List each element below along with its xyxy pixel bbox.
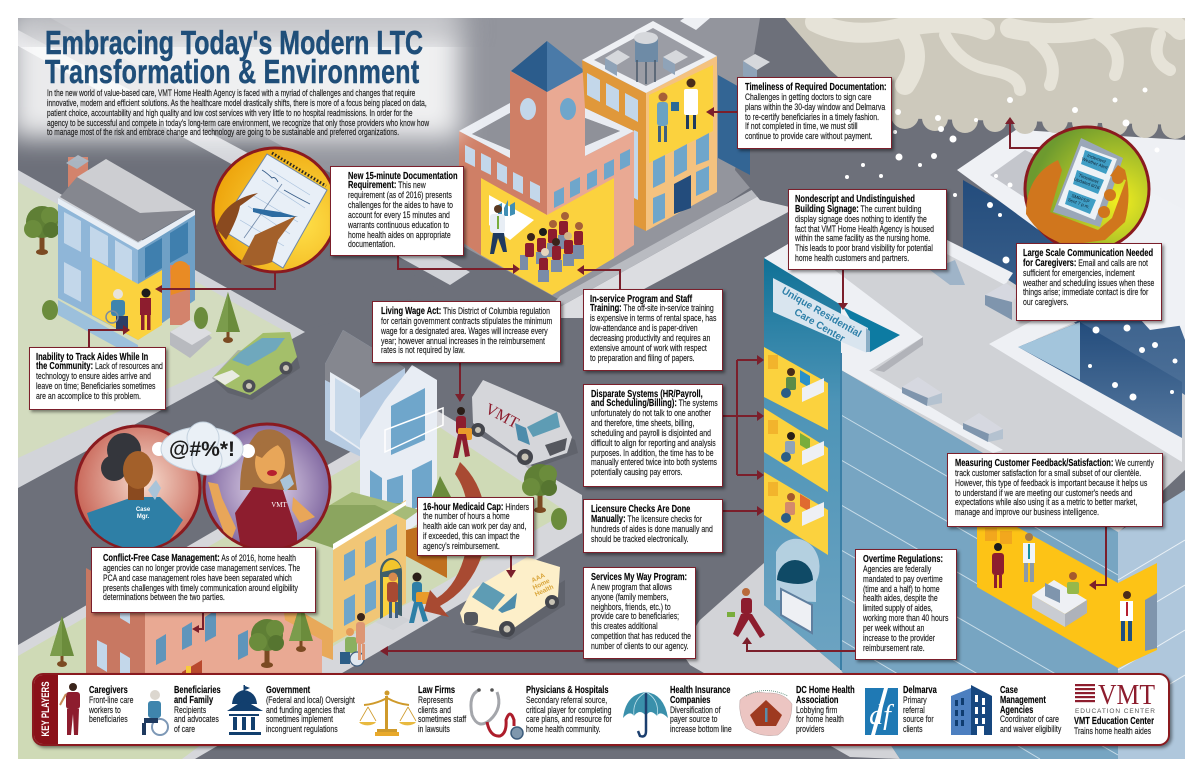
phone circle: Inclement [1086, 153, 1107, 164]
key player text: beneficiaries [174, 685, 221, 734]
speech cloud: @#%*! [169, 438, 235, 461]
front facade with sign [764, 258, 870, 670]
callout: disparate systems: manually entered twice into both systems [590, 457, 717, 467]
callout: customer feedback: expectations while also using it as a metric to better market, [955, 497, 1137, 507]
callout: overtime regulations: increase to the provider [862, 633, 935, 643]
callout: customer feedback: to understand if we are meeting our customer's needs and [955, 488, 1133, 498]
callout: disparate systems: difficult to align for reporting and analysis [590, 438, 715, 448]
key player text: physicians [526, 685, 612, 734]
callout: 16-hour medicaid cap: if exceeded, this can impact the [423, 531, 520, 541]
callout: overtime regulations: limited supply of aides, [862, 603, 932, 613]
key players tab [34, 675, 58, 744]
callout: building signage: display signage does nothing to identify the [795, 214, 927, 224]
upper gray ground [52, 18, 760, 298]
key player text: case management: Agencies [1000, 705, 1033, 716]
callout: customer feedback: However, this type of feedback is important because it helps us [955, 478, 1147, 488]
icon: DC home health association seal [740, 690, 792, 736]
callout: large scale communication: things arise; immediate contact is dire for [1022, 287, 1148, 297]
callout: living wage act: for certain government contracts stipulates the minimum [380, 316, 552, 326]
key player text: physicians: home health community. [526, 724, 601, 734]
key player text: government: and funding agencies that [266, 705, 345, 715]
small roof blocks [680, 18, 770, 77]
key player text: caregivers: workers to [89, 705, 121, 715]
salmon building [86, 568, 322, 680]
callout: 15-minute documentation: Requirement: This new [348, 180, 425, 191]
callout: overtime regulations: per week without an [862, 623, 924, 633]
callout: customer feedback [947, 453, 1163, 527]
long facade [841, 370, 1185, 759]
callout: timeliness of documentation: Timeliness of Required Documentation: [744, 82, 886, 93]
seated audience [520, 212, 584, 282]
key player text: government: sometimes implement [266, 714, 333, 724]
icon: caregiver [60, 683, 80, 735]
phone circle: Timesheet [1078, 173, 1099, 185]
key player text: law firms: Represents [418, 695, 453, 705]
callout: inability to track aides: leave on time; Beneficiaries sometimes [36, 381, 155, 391]
key player text: DC home health: DC Home Health [796, 685, 855, 696]
icon: VMT logo [1075, 680, 1155, 715]
callout: living wage act [372, 301, 561, 363]
phone circle: SMRFEP [1071, 193, 1090, 204]
intro paragraph: In the new world of value-based care, VMT Home Health Agency is faced with a myriad of challenges and changes that require [47, 88, 415, 98]
callout: 15-minute documentation: New 15-minute Documentation [348, 170, 457, 182]
arrowheads [123, 107, 1096, 656]
key player text: case management: Coordinator of care [1000, 714, 1059, 724]
callout: customer feedback: track customer satisfaction for a small subset of our clientèle. [955, 468, 1141, 478]
callout: overtime regulations: mandated to pay overtime [862, 574, 942, 584]
key player text: caregivers: beneficiaries [89, 714, 128, 724]
callout: 16-hour medicaid cap: 16-hour Medicaid Cap: Hinders [423, 502, 529, 512]
salmon tower and lower building [459, 41, 634, 295]
sidewalk going up-right [561, 196, 788, 318]
key player text: physicians: care plans, and resource for [526, 714, 612, 724]
callout: 16-hour medicaid cap: agency's reimbursement. [423, 541, 500, 551]
gold building with doctors [582, 21, 750, 231]
arched door [776, 539, 820, 633]
AAA home health van: Home [532, 577, 551, 592]
callout: licensure checks: Manually: The licensure checks for [591, 514, 702, 525]
callout: 15-minute documentation: requirement (as of 2016) presents [348, 190, 451, 200]
tree top-left [24, 206, 59, 255]
callout: 16-hour medicaid cap [417, 497, 534, 556]
phone circle: Sent 7 p.m. [1067, 197, 1090, 210]
left block [18, 170, 305, 488]
callout: in-service program: In-service Program and Staff [590, 294, 692, 304]
icon: office building [951, 685, 992, 735]
key players band [32, 673, 1170, 746]
key player text: government: (Federal and local) Oversight [266, 695, 355, 705]
key player text: health insurance: payer source to [670, 714, 717, 724]
key player text: law firms [418, 685, 466, 734]
snow roof building [957, 130, 1185, 395]
callout: inability to track aides: are an accomplice to this problem. [36, 391, 140, 401]
case manager portrait: Case [136, 507, 150, 513]
callout: building signage: fact that VMT Home Health Agency is housed [795, 224, 934, 234]
callout: customer feedback: manage and improve our business intelligence. [955, 507, 1099, 517]
phone circle: Weather Alert [1081, 156, 1109, 171]
icon: wheelchair beneficiary [142, 690, 168, 735]
front facade with sign: Care Center [792, 307, 847, 345]
callout: overtime regulations: (time and a half) to home [862, 584, 939, 594]
icon: VMT logo: EDUCATION CENTER [1075, 708, 1155, 715]
VMT staffer portrait [204, 424, 330, 560]
callout: services my way: Services My Way Program: [590, 572, 687, 583]
callout: disparate systems [583, 384, 723, 487]
callout: large scale communication: weather and scheduling issues when these [1022, 278, 1154, 288]
key player text: government: Government [266, 685, 310, 696]
callout: overtime regulations: working more than 40 hours [862, 613, 948, 623]
intro paragraph: innovative, modern and efficient solutions. As the healthcare model drastically shifts, there is more of a focus being placed on data, [47, 98, 427, 108]
callout: licensure checks: should be tracked electronically. [591, 534, 689, 544]
VMT van [471, 380, 578, 470]
central block [18, 406, 582, 759]
callout: 15-minute documentation: account for every 15 minutes and [348, 210, 449, 220]
AAA home health van [460, 557, 565, 640]
walking aide on sidewalk [453, 407, 472, 458]
key player text: health insurance: Companies [670, 695, 710, 706]
connector lines and arrows [89, 112, 1106, 651]
snowflakes [845, 88, 1178, 400]
callout: disparate systems: Disparate Systems (HR/Payroll, [590, 388, 702, 400]
key player text: beneficiaries: Recipients [174, 705, 206, 715]
callout: timeliness of documentation: continue to provide care without payment. [744, 131, 872, 141]
VMT staffer portrait: VMT [271, 501, 287, 509]
tree and shrubs middle [432, 464, 567, 530]
callout: living wage act: wage for a designated area. Wages will increase every [380, 326, 547, 336]
title: Transformation & Environment [45, 54, 419, 91]
residents and aide at yellow building [387, 572, 430, 623]
callout: building signage [788, 189, 947, 270]
key player text: DC home health: providers [796, 724, 824, 734]
icon: Delmarva logo: df [869, 700, 894, 731]
callout: overtime regulations: health aides, despite the [862, 593, 937, 603]
wheelchair and aide [340, 613, 365, 666]
callout: large scale communication: our caregivers. [1022, 297, 1068, 307]
callout: in-service program: Training: The off-site in-service training [590, 303, 713, 314]
key player text: case management [1000, 685, 1062, 734]
callout: services my way [583, 567, 696, 659]
key player text: health insurance: Diversification of [670, 705, 721, 715]
key player text: DC home health: for home health [796, 714, 844, 724]
phone circle [1025, 127, 1149, 251]
icon: umbrella [623, 692, 668, 736]
key player text: DC home health: Association [796, 695, 839, 706]
callout: conflict-free case management: agencies can no longer provide case management services. The [102, 563, 300, 573]
callout: licensure checks [583, 499, 723, 553]
key player text: Delmarva [903, 685, 937, 734]
key player text: physicians: critical player for completing [526, 705, 611, 715]
key player text: Delmarva: source for [903, 714, 934, 724]
callout: services my way: this creates additional [590, 621, 657, 631]
key player text: health insurance: Health Insurance [670, 685, 730, 696]
callout: in-service program: extensive amount of work with respect [590, 343, 706, 353]
key player text: law firms: Law Firms [418, 685, 455, 696]
green and yellow building [280, 492, 447, 660]
AAA home health van: AAA [531, 572, 547, 584]
callout: in-service program: low-attendance and is paper-driven [590, 323, 697, 333]
callout: licensure checks: hundreds of aides is done manually and [591, 524, 713, 534]
key player text: VMT education center [1074, 716, 1154, 736]
callout: living wage act: year; however annual increases in the reimbursement [380, 336, 544, 346]
case manager portrait [76, 426, 200, 555]
callout: conflict-free case management [91, 547, 316, 613]
key player text: beneficiaries: Beneficiaries [174, 685, 221, 696]
icon: Delmarva logo [865, 688, 898, 735]
callout: large scale communication: for Caregivers: Email and calls are not [1022, 258, 1147, 269]
callout: large scale communication: sufficient for emergencies, inclement [1022, 268, 1134, 278]
callout: large scale communication: Large Scale Communication Needed [1022, 248, 1153, 259]
house steps and plants [42, 292, 240, 358]
callout: 15-minute documentation: warrants continuous education to [348, 220, 449, 230]
callout: inability to track aides [29, 347, 166, 410]
key player text: physicians: Physicians & Hospitals [526, 685, 609, 696]
key player text: law firms: clients and [418, 705, 451, 715]
title [45, 25, 423, 91]
callout: overtime regulations: Overtime Regulations: [862, 554, 943, 565]
white house [325, 330, 443, 540]
VMT van: VMT [482, 401, 522, 432]
key player text: DC home health [796, 685, 855, 734]
callout: living wage act: Living Wage Act: This District of Columbia regulation [380, 306, 549, 317]
callout: 15-minute documentation: documentation. [348, 239, 395, 249]
callout: disparate systems: unfortunately do not talk to one another [590, 408, 710, 418]
callout: conflict-free case management: Conflict-Free Case Management: As of 2016, home health [102, 553, 295, 564]
key player text: government [266, 685, 355, 734]
callout: overtime regulations: reimbursement rate. [862, 643, 924, 653]
street trees bottom [50, 613, 313, 668]
callout: building signage: Nondescript and Undistinguished [795, 194, 915, 205]
icon: stethoscope [471, 688, 523, 739]
callout: inability to track aides: the Community: Lack of resources and [36, 361, 162, 372]
callout: 16-hour medicaid cap: the number of hours a home [423, 511, 510, 521]
key player text: law firms: sometimes staff [418, 714, 466, 724]
callout: services my way: A new program that allows [590, 582, 671, 592]
key player text: Delmarva: Delmarva [903, 685, 937, 696]
phone circle: Updated 6/16 [1073, 176, 1101, 190]
callout: conflict-free case management: PCA and case management roles have been separated which [102, 573, 291, 583]
callout: inability to track aides: technology to ensure aides arrive and [36, 371, 150, 381]
callout: timeliness of documentation: Challenges in getting doctors to sign care [744, 92, 871, 102]
callout: building signage: home health customers and partners. [795, 253, 909, 263]
green car [212, 332, 300, 400]
callout: disparate systems: scheduling and payroll is disjointed and [590, 428, 710, 438]
callout: disparate systems: and therefore, time sheets, billing, [590, 418, 694, 428]
callout: timeliness of documentation: to re-certify beneficiaries in a timely fashion. [744, 112, 879, 122]
callout: overtime regulations: Agencies are federally [862, 564, 931, 574]
callout: conflict-free case management: presents challenges with timely communication around eligibility [102, 583, 297, 593]
callout: in-service program: decreasing productivity and requires an [590, 333, 710, 343]
key player text: Delmarva: referral [903, 705, 925, 715]
callout: building signage: This leads to poor brand visibility for potential [795, 243, 933, 253]
callout: timeliness of documentation [737, 77, 892, 149]
title: Embracing Today's Modern LTC [45, 25, 423, 62]
callout: in-service program: to preparation and filing of papers. [590, 353, 694, 363]
callout: living wage act: rates is not required by law. [380, 345, 464, 355]
speech cloud [152, 422, 255, 475]
key player text: beneficiaries: and advocates [174, 714, 219, 724]
key player text: caregivers [89, 685, 134, 724]
callout: licensure checks: Licensure Checks Are Done [591, 504, 690, 515]
key player text: law firms: in lawsuits [418, 724, 450, 734]
key player text: VMT education center: VMT Education Center [1074, 716, 1154, 727]
callout: 15-minute documentation: challenges for the aides to have to [348, 200, 452, 210]
callout: inability to track aides: Inability to Track Aides While In [36, 352, 148, 362]
intro paragraph: patient choice, accountability and high quality and low cost services with very little to no hospital readmissions. In order for the [47, 108, 413, 118]
callout: building signage: Building Signage: The current building [795, 204, 921, 215]
key player text: caregivers: Caregivers [89, 685, 128, 696]
callout: overtime regulations [855, 549, 957, 660]
case manager portrait: Mgr. [137, 514, 149, 520]
blue house [58, 155, 195, 359]
key player text: government: incongruent regulations [266, 724, 338, 734]
office windows [764, 347, 828, 555]
intro paragraph: agency to be successful and compete in today's long-term care environment, we recognize that only those providers who know how [47, 118, 429, 128]
callout: 15-minute documentation: home health aides on appropriate [348, 230, 450, 240]
callout: customer feedback: Measuring Customer Feedback/Satisfaction: We currently [955, 458, 1154, 469]
key player text: beneficiaries: and Family [174, 695, 213, 706]
callout: timeliness of documentation: plans within the 30-day window and Delmarva [744, 102, 885, 112]
right pavement [680, 563, 900, 759]
callout: services my way: competition that has reduced the [590, 631, 690, 641]
cloud [785, 17, 1189, 139]
reception lobby [977, 527, 1157, 668]
callout: 15-minute documentation [330, 166, 464, 256]
key player text: caregivers: Front-line care [89, 695, 133, 705]
key player text: case management: and waiver eligibility [1000, 724, 1061, 734]
key player text: beneficiaries: of care [174, 724, 195, 734]
title glow panel [10, 10, 460, 138]
intro paragraph [47, 88, 430, 138]
key player text: case management: Management [1000, 695, 1046, 706]
key player text: case management: Case [1000, 685, 1018, 696]
callout: disparate systems: purposes. In addition, the time has to be [590, 448, 713, 458]
callout: in-service program: is expensive in terms of rental space, has [590, 313, 716, 323]
callout: in-service program [583, 289, 723, 371]
icon: VMT logo: VMT [1098, 680, 1155, 711]
walking aide with money [727, 588, 765, 638]
callout: services my way: provide care to beneficiaries; [590, 611, 679, 621]
beneficiary and aide in house [106, 288, 151, 330]
icon: government building [227, 685, 263, 735]
key player text: physicians: Secondary referral source, [526, 695, 607, 705]
notebook circle [213, 148, 337, 272]
icon: scales of justice [359, 690, 416, 736]
callout: services my way: number of clients to our agency. [590, 641, 688, 651]
callout: conflict-free case management: determinations between the two parties. [102, 592, 224, 602]
key player text: DC home health: Lobbying firm [796, 705, 837, 715]
intro paragraph: to manage most of the risk and embrace change and technology are going to be sustainable and preferred organizations. [47, 127, 399, 137]
callout: timeliness of documentation: If not completed in time, we must still [744, 121, 857, 131]
callout: disparate systems: and Scheduling/Billing): The systems [590, 398, 717, 409]
key player text: VMT education center: Trains home health aides [1074, 726, 1151, 736]
callout: services my way: anyone (family members, [590, 592, 668, 602]
front facade with sign: Unique Residential [780, 286, 863, 340]
key player text: health insurance: increase bottom line [670, 724, 732, 734]
key player text: health insurance [670, 685, 732, 734]
callout: large scale communication [1016, 243, 1162, 321]
curved red arrow [424, 462, 486, 617]
main building roof [764, 240, 1185, 533]
key player text: Delmarva: clients [903, 724, 923, 734]
key player text: Delmarva: Primary [903, 695, 927, 705]
callout: 16-hour medicaid cap: health aide can work per day and, [423, 521, 526, 531]
callout: services my way: neighbors, friends, etc.) to [590, 602, 670, 612]
AAA home health van: Health [534, 584, 555, 598]
callout: building signage: within the same facility as the nursing home. [795, 233, 930, 243]
callout: disparate systems: potentially causing pay errors. [590, 467, 682, 477]
key players tab: KEY PLAYERS [40, 681, 52, 737]
